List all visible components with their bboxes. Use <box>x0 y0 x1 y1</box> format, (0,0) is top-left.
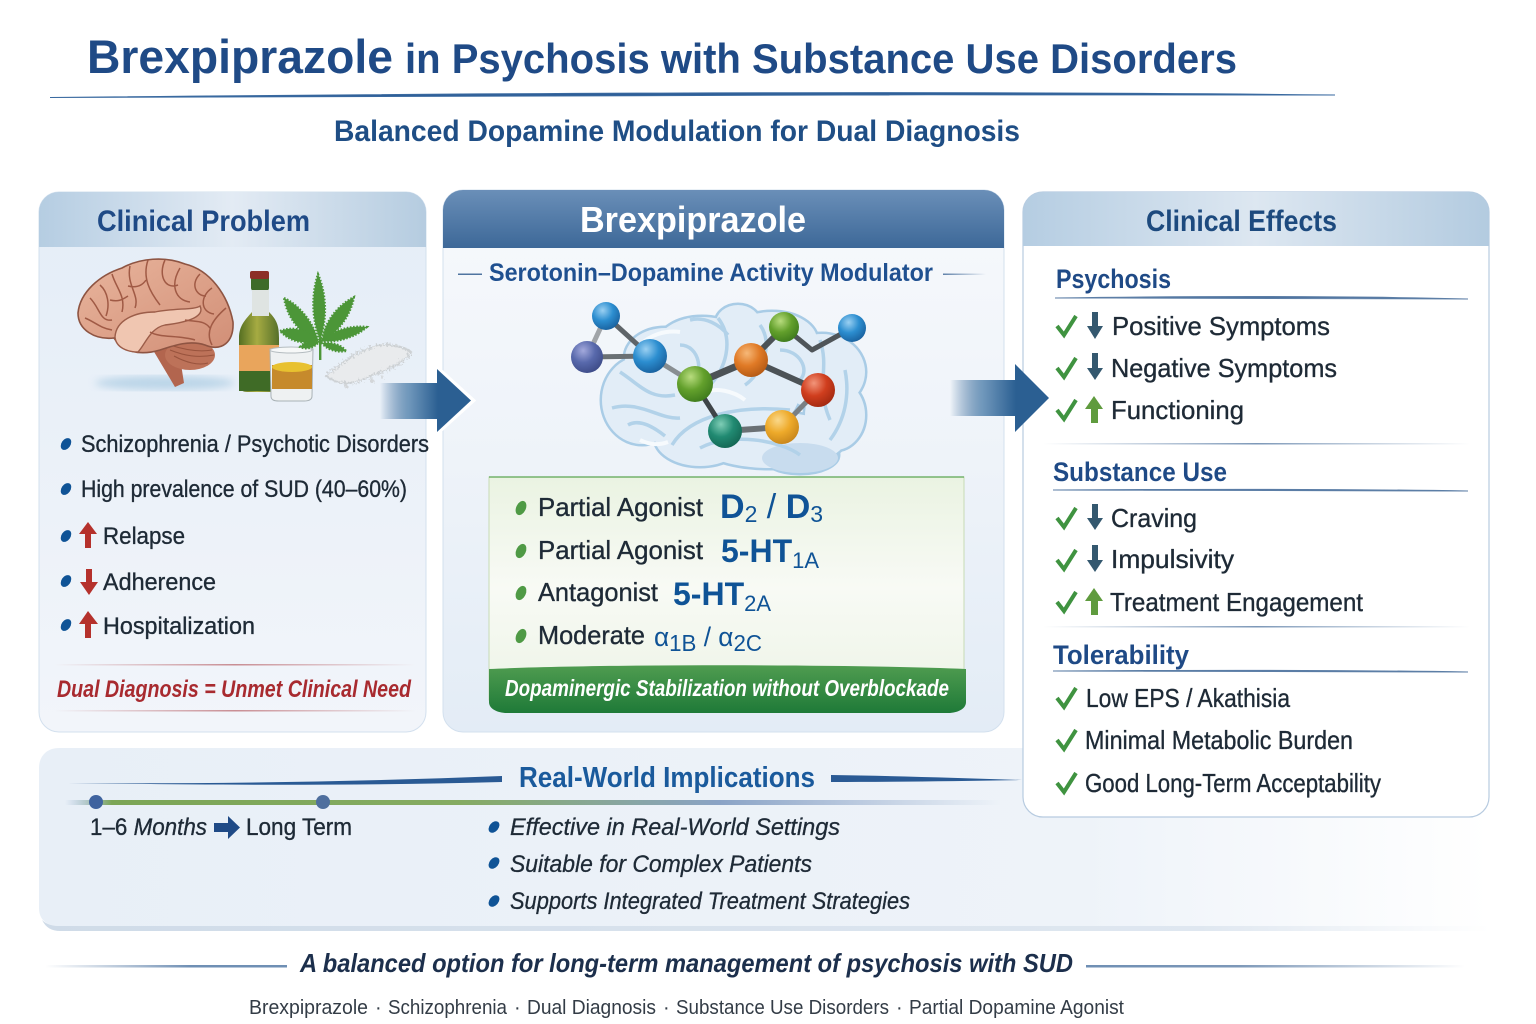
panel: clinical problem <box>39 192 429 732</box>
timeline: 1–6 Months <box>90 814 207 841</box>
panel background <box>1023 192 1489 817</box>
receptor row 4: 1B <box>669 630 696 656</box>
green banner: Dopaminergic Stabilization without Overblockade <box>505 675 949 701</box>
receptor row 3: 5-HT <box>673 576 744 612</box>
panel header <box>39 192 426 247</box>
panel header <box>443 190 1004 248</box>
implications list: Supports Integrated Treatment Strategies <box>510 888 910 915</box>
section: psychosis: Negative Symptoms <box>1111 353 1337 383</box>
icon: bottle <box>239 271 279 392</box>
green banner <box>489 665 966 713</box>
footer keywords <box>249 997 1124 1019</box>
section: tolerability: Low EPS / Akathisia <box>1086 683 1290 713</box>
title underline <box>50 93 1335 98</box>
section: tolerability <box>1053 640 1468 798</box>
section: psychosis: Psychosis <box>1056 264 1171 294</box>
section: substance use: Treatment Engagement <box>1110 587 1364 617</box>
footer keywords: Dual Diagnosis <box>527 997 656 1019</box>
receptor row 1: 2 <box>745 501 757 527</box>
receptor row 4: Moderate <box>538 620 645 650</box>
bullet list: Relapse <box>103 523 185 550</box>
title: in Psychosis with Substance Use Disorders <box>405 35 1237 82</box>
mechanism label: Serotonin–Dopamine Activity Modulator <box>489 259 933 287</box>
footer keywords: · <box>375 997 382 1019</box>
section: substance use <box>1053 457 1468 617</box>
footer keywords: Partial Dopamine Agonist <box>909 997 1124 1019</box>
footer keywords: Brexpiprazole <box>249 997 368 1019</box>
section: psychosis: Functioning <box>1111 395 1244 425</box>
receptor row 4: α <box>718 622 734 652</box>
panel background <box>443 190 1004 732</box>
section: substance use: Impulsivity <box>1111 544 1234 574</box>
bullet list: High prevalence of SUD (40–60%) <box>81 476 407 503</box>
implications list: Effective in Real-World Settings <box>510 814 840 841</box>
footer keywords: Substance Use Disorders <box>676 997 889 1019</box>
bullet list <box>59 431 429 640</box>
receptor row 3 <box>513 576 771 616</box>
panel: brexpiprazole <box>443 190 1004 732</box>
receptor row 2: Partial Agonist <box>538 535 704 565</box>
icon: leaf stem <box>319 338 321 360</box>
receptor row 2 <box>513 533 819 573</box>
implications list <box>486 814 910 915</box>
section heading <box>68 762 1022 794</box>
icon: brain <box>78 259 235 390</box>
subtitle: Balanced Dopamine Modulation for Dual Diagnosis <box>334 115 1020 148</box>
receptor row 1: / <box>757 488 786 526</box>
receptor row 4 <box>513 620 762 656</box>
title: Brexpiprazole <box>87 30 393 83</box>
receptor row 1: Partial Agonist <box>538 492 704 522</box>
timeline <box>65 795 1000 841</box>
footer keywords: · <box>896 997 903 1019</box>
footer keywords: Schizophrenia <box>388 997 508 1019</box>
section: psychosis: Positive Symptoms <box>1112 311 1330 341</box>
receptor row 4: / <box>696 622 718 652</box>
bullet list: Adherence <box>103 569 216 596</box>
receptor row 4: α <box>654 622 670 652</box>
panel header: Clinical Effects <box>1146 205 1337 238</box>
panel: real-world implications <box>39 748 1490 931</box>
section heading: Real-World Implications <box>519 762 815 794</box>
footer takeaway: A balanced option for long-term management of psychosis with SUD <box>299 948 1073 978</box>
icon: powder <box>326 345 411 388</box>
title <box>87 30 1237 83</box>
receptor row 1: D <box>720 488 745 526</box>
panel header: Clinical Problem <box>97 205 310 238</box>
receptor row 1 <box>513 488 823 527</box>
receptor row 2: 5-HT <box>721 533 792 569</box>
section: tolerability: Tolerability <box>1053 640 1189 670</box>
icon: whisky glass <box>270 347 313 401</box>
icon: cannabis leaf <box>280 274 367 352</box>
arrow: problem to drug <box>380 366 474 435</box>
footer keywords: · <box>663 997 670 1019</box>
receptor row 3: Antagonist <box>538 577 659 607</box>
panel header <box>1023 192 1489 246</box>
receptor row 1: 3 <box>810 501 823 527</box>
section: substance use: Substance Use <box>1053 457 1227 487</box>
panel background <box>39 748 1490 926</box>
icon: molecule on brain <box>571 302 866 473</box>
receptor row 1: D <box>786 488 810 526</box>
receptor profile box <box>489 477 964 700</box>
bullet list: Schizophrenia / Psychotic Disorders <box>81 431 429 458</box>
receptor row 3: 2A <box>744 591 771 616</box>
implications list: Suitable for Complex Patients <box>510 851 812 878</box>
receptor row 2: 1A <box>792 548 819 573</box>
arrow: drug to effects <box>950 364 1049 432</box>
bullet list: Hospitalization <box>103 613 255 640</box>
receptor row 4: 2C <box>733 630 762 656</box>
panel header: Brexpiprazole <box>580 199 806 240</box>
callout: unmet need: Dual Diagnosis = Unmet Clinical Need <box>57 676 412 703</box>
section: psychosis <box>1055 264 1468 425</box>
panel: clinical effects <box>1023 192 1489 817</box>
section: substance use: Craving <box>1111 503 1197 533</box>
timeline: Long Term <box>246 814 352 841</box>
section: tolerability: Good Long-Term Acceptability <box>1085 768 1381 798</box>
panel background <box>39 192 426 732</box>
section: tolerability: Minimal Metabolic Burden <box>1085 725 1353 755</box>
footer keywords: · <box>514 997 521 1019</box>
